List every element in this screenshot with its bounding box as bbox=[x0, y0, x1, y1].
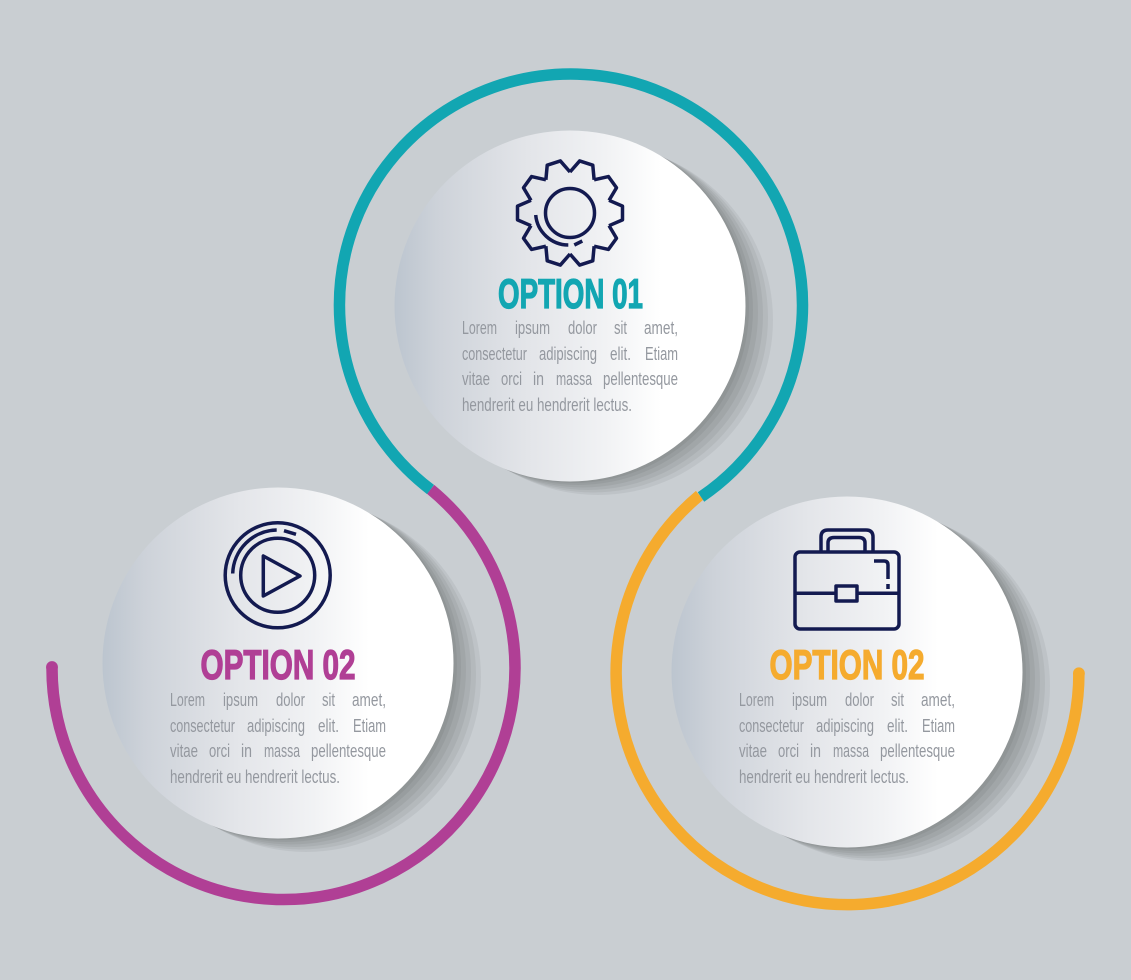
ring: orange arc bbox=[616, 495, 1079, 905]
text block: option 01 body: consectetur bbox=[462, 344, 527, 364]
heading: option 02 magenta: OPTION 02 bbox=[200, 641, 356, 688]
text block: option 02 orange body: amet, bbox=[921, 690, 955, 710]
heading: option 01: OPTION 01 bbox=[498, 270, 643, 317]
text block: option 02 orange body: consectetur bbox=[739, 716, 804, 736]
text block: option 01 body: dolor bbox=[568, 318, 597, 338]
panel: option 02 magenta disc with layered shadow bbox=[102, 488, 481, 852]
ring: orange rounded end cap bbox=[1073, 667, 1085, 679]
text block: option 01 body: vitae bbox=[462, 369, 490, 389]
text block: option 02 orange body: Lorem bbox=[739, 690, 774, 710]
ring: teal arc bbox=[339, 74, 802, 497]
text block: option 02 magenta body: Etiam bbox=[353, 716, 386, 736]
text block: option 02 magenta body: consectetur bbox=[170, 716, 235, 736]
text block: option 02 magenta body: orci bbox=[209, 741, 230, 761]
text block: option 02 magenta body: massa bbox=[264, 741, 301, 761]
heading: option 02 orange: OPTION 02 bbox=[770, 641, 924, 688]
text block: option 01 body: pellentesque bbox=[603, 369, 678, 389]
text block: option 01 body: adipiscing bbox=[539, 344, 597, 364]
text block: option 01 body: sit bbox=[614, 318, 627, 338]
icon: briefcase bbox=[795, 530, 899, 629]
text block: option 01 body: elit. bbox=[610, 344, 631, 364]
text block: option 01 body: ipsum bbox=[515, 318, 550, 338]
text block: option 02 magenta body: pellentesque bbox=[311, 741, 386, 761]
text block: option 01 body: amet, bbox=[644, 318, 678, 338]
text block: option 01 body: Etiam bbox=[645, 344, 678, 364]
text block: option 02 orange body: in bbox=[810, 741, 821, 761]
text block: option 02 orange body: massa bbox=[833, 741, 870, 761]
text block: option 02 magenta body: amet, bbox=[352, 690, 386, 710]
text block: option 02 magenta body: vitae bbox=[170, 741, 198, 761]
text block: option 02 orange body: dolor bbox=[845, 690, 874, 710]
text block: option 02 orange body: Etiam bbox=[922, 716, 955, 736]
text block: option 02 magenta body: Lorem bbox=[170, 690, 205, 710]
text block: option 02 orange body: hendrerit eu hendrerit lectus. bbox=[739, 767, 909, 787]
text block: option 02 magenta body: dolor bbox=[276, 690, 305, 710]
text block: option 02 orange body bbox=[739, 690, 955, 787]
text block: option 02 orange body: sit bbox=[891, 690, 904, 710]
text block: option 02 orange body: ipsum bbox=[792, 690, 827, 710]
text block: option 02 orange body: elit. bbox=[887, 716, 908, 736]
text block: option 02 magenta body: in bbox=[241, 741, 252, 761]
panel: option 02 orange disc with layered shadow bbox=[672, 496, 1050, 861]
panel: option 01 disc with layered shadow bbox=[394, 130, 773, 495]
text block: option 01 body: massa bbox=[556, 369, 593, 389]
icon: play button bbox=[225, 523, 330, 628]
ring: magenta arc bbox=[52, 489, 515, 900]
text block: option 01 body: in bbox=[533, 369, 544, 389]
text block: option 02 magenta body: hendrerit eu hendrerit lectus. bbox=[170, 767, 340, 787]
ring: magenta rounded end cap bbox=[46, 661, 58, 673]
text block: option 02 orange body: vitae bbox=[739, 741, 767, 761]
text block: option 02 magenta body: elit. bbox=[318, 716, 339, 736]
text block: option 02 orange body: adipiscing bbox=[816, 716, 874, 736]
text block: option 02 magenta body: adipiscing bbox=[247, 716, 305, 736]
text block: option 01 body bbox=[462, 318, 678, 415]
text block: option 02 orange body: orci bbox=[778, 741, 799, 761]
text block: option 01 body: Lorem bbox=[462, 318, 497, 338]
text block: option 01 body: orci bbox=[501, 369, 522, 389]
text block: option 02 magenta body bbox=[170, 690, 386, 787]
text block: option 02 magenta body: sit bbox=[322, 690, 335, 710]
text block: option 02 orange body: pellentesque bbox=[880, 741, 955, 761]
text block: option 02 magenta body: ipsum bbox=[223, 690, 258, 710]
icon: gear bbox=[518, 159, 622, 267]
text block: option 01 body: hendrerit eu hendrerit lectus. bbox=[462, 395, 632, 415]
